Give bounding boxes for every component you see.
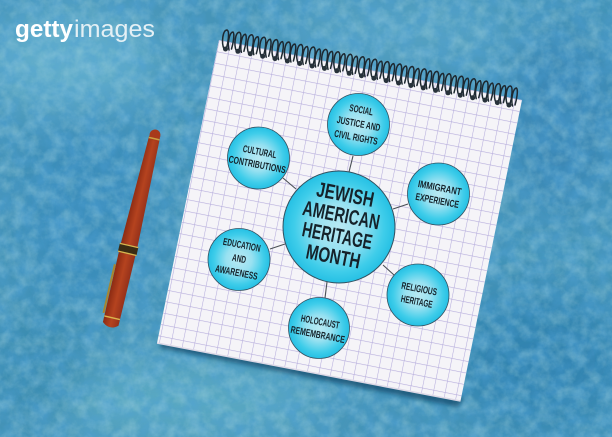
spiral binding (223, 30, 517, 108)
notebook shadow (160, 340, 464, 407)
bubble: Holocaust Remembrance (288, 298, 350, 358)
bubble: Holocaust Remembrance: HOLOCAUST (300, 313, 340, 332)
watermark: getty images: getty (15, 16, 74, 43)
bubble: Religious Heritage (387, 264, 449, 326)
bubble: Cultural Contributions (228, 127, 290, 189)
central bubble: Jewish American Heritage Month (283, 171, 395, 283)
central bubble: Jewish American Heritage Month: MONTH (304, 240, 362, 273)
bubble: Immigrant Experience (408, 163, 470, 225)
bubble: Holocaust Remembrance: REMEMBRANCE (290, 325, 346, 346)
bubble: Cultural Contributions: CONTRIBUTIONS (228, 154, 287, 176)
bubble: Religious Heritage: HERITAGE (400, 294, 434, 311)
bubble: Religious Heritage: RELIGIOUS (400, 281, 438, 298)
watermark: getty images (15, 16, 155, 43)
central bubble: Jewish American Heritage Month: AMERICAN (301, 197, 382, 234)
bubble: Social Justice and Civil Rights: SOCIAL (348, 103, 374, 118)
notebook (157, 30, 522, 407)
mind map (208, 94, 470, 358)
bubble: Social Justice and Civil Rights: CIVIL RIGHTS (333, 129, 379, 148)
bubble: Social Justice and Civil Rights (328, 94, 390, 156)
central bubble: Jewish American Heritage Month: JEWISH (315, 178, 376, 212)
bubble: Education and Awareness (208, 228, 270, 290)
pen (100, 127, 166, 329)
bubble: Education and Awareness: EDUCATION (222, 237, 261, 255)
notebook page (157, 40, 522, 401)
connectors (270, 156, 408, 298)
bubble: Immigrant Experience: EXPERIENCE (414, 192, 460, 211)
bubble: Education and Awareness: AND (231, 253, 247, 266)
bubble: Immigrant Experience: IMMIGRANT (417, 179, 462, 198)
bubble: Education and Awareness: AWARENESS (214, 264, 259, 283)
watermark: getty images: images (74, 16, 155, 43)
bubble: Social Justice and Civil Rights: JUSTICE AND (336, 115, 381, 134)
central bubble: Jewish American Heritage Month: HERITAGE (300, 218, 374, 254)
bubble: Cultural Contributions: CULTURAL (242, 144, 277, 161)
